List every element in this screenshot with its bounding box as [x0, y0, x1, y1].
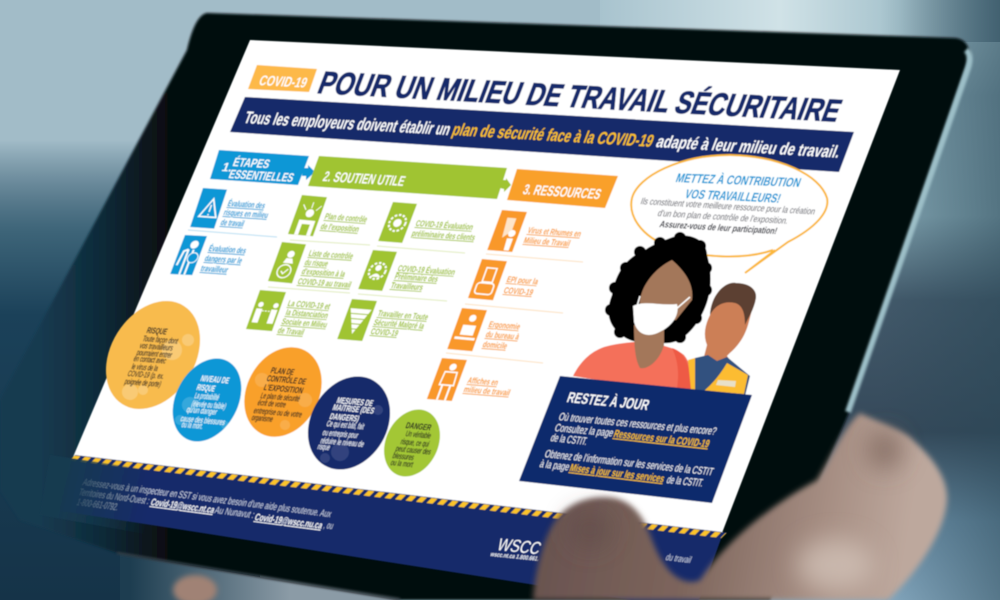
resource: distanciation sociale: la Distanciation — [284, 307, 330, 320]
wscc logo and contact: du travail — [664, 552, 693, 565]
hazard stripe — [72, 458, 724, 536]
bubble: risque: le virus de la — [130, 361, 160, 373]
resource: distanciation sociale: Sociale en Milieu — [280, 316, 329, 330]
speech bubble: METTEZ À CONTRIBUTION — [674, 170, 803, 190]
panel: restez à jour: Mises à jour sur les services — [568, 462, 666, 485]
bubble: niveau de risque: cause des blessures — [179, 413, 227, 427]
subtitle banner — [230, 97, 854, 172]
bubble: niveau de risque: NIVEAU DE — [199, 373, 231, 385]
resource: liste de contrôle: Liste de contrôle — [307, 248, 355, 261]
footer contact text — [75, 477, 335, 532]
dividers — [188, 230, 583, 363]
bubble: plan de contrôle de l'exposition: Le plan de sécurité — [259, 390, 302, 403]
resource: ergonomie: du bureau à — [484, 329, 521, 342]
footer contact text: Covid-19@wscc.nu.ca — [253, 512, 324, 532]
panel: restez à jour — [519, 376, 752, 503]
resource: affiches: milieu de travail — [462, 384, 512, 398]
resource: évaluation travailleurs: COVID-19 Évaluation — [396, 263, 457, 277]
resource: évaluation des dangers: travailleur — [199, 263, 230, 275]
bubble: danger: risque, ce qui — [399, 436, 431, 449]
resource: epi — [468, 259, 540, 300]
resource: liste de contrôle: d'exposition à la — [300, 266, 347, 279]
bubble: risque: en contact avec — [132, 353, 168, 365]
header 2: soutien utile: 2. SOUTIEN UTILE — [321, 169, 408, 190]
resource: liste de contrôle: du risque — [303, 257, 330, 269]
bubble: niveau de risque: La probabilité — [193, 390, 221, 402]
screen white background — [73, 40, 900, 533]
panel: restez à jour: RESTEZ À JOUR — [565, 389, 652, 414]
bubble: plan de contrôle de l'exposition — [229, 334, 337, 450]
resource: ergonomie: domicile — [481, 339, 509, 351]
header 1: étapes essentielles: ESSENTIELLES — [227, 167, 296, 185]
bubble: mesures de maîtrise: MESURES DE — [335, 395, 375, 408]
resource: évaluation des risques — [190, 188, 270, 229]
footer contact text: Territoires du Nord-Ouest : — [77, 487, 151, 507]
wscc logo and contact: wscc.nt.ca 1.800.661. — [488, 551, 540, 563]
resource: distanciation sociale — [246, 290, 332, 337]
resource: ergonomie — [447, 308, 522, 351]
panel: restez à jour: de la CSTIT. — [549, 432, 589, 448]
bubble: niveau de risque: RISQUE — [195, 382, 217, 394]
bubble: plan de contrôle de l'exposition: PLAN DE — [269, 365, 296, 377]
footer contact text: Au Nunavut : — [213, 505, 256, 521]
panel: restez à jour: Ressources sur la COVID-19 — [612, 428, 711, 450]
panel: restez à jour: de la CSTIT. — [665, 474, 705, 490]
resource: évaluation des dangers: Évaluation des — [207, 243, 248, 256]
resource: virus et rhumes: Milieu de Travail — [522, 235, 572, 248]
bubble: mesures de maîtrise: DANGERS) — [328, 411, 361, 424]
bubble: mesures de maîtrise: Ce qui est bâti, fait — [325, 418, 366, 431]
bubble: danger: blessures — [391, 450, 416, 462]
resource: évaluation des dangers — [170, 235, 248, 275]
speech bubble: Ils constituent votre meilleure ressource pour la création — [639, 196, 817, 216]
footer contact text: 1-800-661-0792. — [75, 497, 120, 513]
header 1: étapes essentielles: ÉTAPES — [231, 154, 272, 171]
bubble: danger — [373, 400, 451, 486]
bubble: mesures de maîtrise — [292, 362, 406, 484]
bubble: danger: Un véritable — [404, 428, 433, 440]
resource: liste de contrôle — [268, 242, 355, 290]
finger under the tablet — [173, 575, 217, 600]
arrow: green — [500, 178, 511, 192]
resource: virus et rhumes — [487, 210, 583, 252]
illustration: man with vest — [688, 283, 756, 396]
resource: distanciation sociale: de Travail — [276, 325, 306, 337]
bubble: plan de contrôle de l'exposition: L'EXPOSITION — [262, 382, 305, 395]
bubble: danger: ou la mort — [389, 457, 415, 469]
bubble: risque: poignée de porte) — [123, 376, 163, 389]
footer band — [40, 455, 724, 600]
speech bubble: d'un bon plan de contrôle de l'exposition. — [656, 208, 790, 226]
bubble: risque: pourraient entrer — [135, 347, 174, 360]
resource: plan de contrôle: Plan de contrôle — [323, 211, 369, 224]
header 1: étapes essentielles — [210, 150, 309, 185]
bubble: mesures de maîtrise: MAÎTRISE (DES — [331, 401, 376, 416]
resource: distanciation sociale: La COVID-19 et — [286, 298, 332, 311]
subtitle banner: adapté à leur milieu de travail. — [654, 132, 844, 162]
bubble: niveau de risque — [159, 347, 255, 453]
bubble: risque — [87, 284, 219, 426]
resource: évaluation des dangers: dangers par le — [203, 253, 244, 266]
speech bubble — [631, 155, 827, 273]
resource: ergonomie: Ergonomie — [487, 319, 522, 331]
hand with thumb — [533, 413, 947, 600]
bubble: plan de contrôle de l'exposition: CONTRÔLE DE — [265, 372, 308, 386]
resource: liste de contrôle: COVID-19 au travail — [296, 276, 353, 290]
bubble: danger: peut causer des — [394, 443, 433, 456]
bubble: mesures de maîtrise: risque — [316, 441, 332, 452]
title: POUR UN MILIEU DE TRAVAIL SÉCURITAIRE — [313, 65, 847, 128]
hand highlights — [568, 430, 903, 591]
covid tag — [248, 65, 317, 92]
bubble: niveau de risque: qu'un danger — [185, 404, 219, 417]
panel: restez à jour: Consultez la page — [553, 422, 615, 439]
bubble: mesures de maîtrise: réduire le niveau de — [319, 435, 366, 449]
resource: évaluation travailleurs: Préliminaire des — [393, 271, 440, 284]
wscc logo and contact: WSCC — [494, 535, 544, 558]
bubble: niveau de risque: ou la mort. — [180, 419, 205, 431]
speech bubble: VOS TRAVAILLEURS! — [683, 186, 783, 206]
resource: évaluation clients: préliminaire des clients — [410, 228, 477, 242]
resource: évaluation clients: COVID-19 Évaluation — [414, 218, 475, 232]
resource: plan de contrôle: de l'exposition — [319, 221, 361, 234]
bubble: plan de contrôle de l'exposition: entreprise ou de votre — [252, 405, 304, 419]
mask — [633, 303, 678, 335]
resource: plan de contrôle — [288, 195, 369, 236]
bubble: plan de contrôle de l'exposition: écrit de votre — [256, 397, 288, 409]
resource: epi: COVID-19 — [502, 285, 535, 297]
speech bubble: Assurez-vous de leur participation! — [658, 219, 779, 236]
bubble: risque: vos travailleurs — [138, 340, 175, 353]
tablet lower rim — [117, 553, 400, 599]
footer left fade — [40, 455, 150, 535]
resource: évaluation des risques: Évaluation des — [226, 198, 267, 211]
tablet right metal rim — [848, 50, 970, 412]
bubble: plan de contrôle de l'exposition: organisme — [250, 412, 275, 424]
resource: travailler en toute sécurité: COVID-19 — [369, 326, 400, 338]
resource: virus et rhumes: Virus et Rhumes en — [526, 225, 583, 239]
bubble: risque: Toute façon dont — [141, 333, 180, 346]
subtitle banner: Tous les employeurs doivent établir un — [242, 108, 454, 139]
resource: affiches: Affiches en — [466, 375, 500, 387]
resource: affiches — [427, 358, 512, 401]
resource: travailler en toute sécurité: Sécurité Malgré la — [372, 317, 426, 331]
footer contact text: Covid-19@wscc.nt.ca — [149, 497, 216, 516]
resource: évaluation des risques: risques en milieu — [222, 207, 270, 220]
header 3: ressources — [507, 169, 618, 208]
bubble: danger: DANGER — [404, 420, 433, 432]
resource: travailler en toute sécurité: Travailler en Toute — [376, 308, 430, 322]
wscc logo and contact — [488, 535, 693, 565]
illustration: woman with mask — [573, 232, 712, 395]
resource: travailler en toute sécurité — [337, 299, 430, 341]
subtitle banner: plan de sécurité face à la COVID-19 — [450, 120, 657, 151]
footer contact text: Adressez-vous à un inspecteur en SST si vous avez besoin d'une aide plus soutenue. Aux — [81, 477, 333, 520]
covid tag: COVID-19 — [257, 73, 309, 91]
bubble: risque: COVID-19 (p. ex. — [126, 368, 166, 381]
header 1: étapes essentielles: 1. — [220, 160, 235, 174]
footer contact text: , ou — [322, 520, 335, 532]
panel: restez à jour: à la page — [538, 458, 571, 473]
resource: évaluation travailleurs: Travailleurs — [389, 280, 425, 292]
header 3: ressources: 3. RESSOURCES — [521, 182, 604, 203]
bubble: mesures de maîtrise: ou entrepris pour — [321, 427, 360, 440]
header 2: soutien utile — [308, 156, 507, 199]
arrow: blue — [302, 165, 315, 180]
bubble: niveau de risque: (élevée ou faible) — [190, 398, 228, 411]
panel: restez à jour: Obtenez de l'information sur les services de la CSTIT — [543, 448, 715, 478]
panel: restez à jour: Où trouver toutes ces ressources et plus encore? — [557, 411, 718, 438]
bubble: risque: RISQUE — [145, 325, 169, 337]
resource: évaluation travailleurs — [358, 250, 457, 292]
resource: évaluation clients — [378, 202, 477, 243]
resource: évaluation des risques: de travail — [219, 217, 246, 229]
resource: epi: EPI pour la — [505, 274, 540, 286]
